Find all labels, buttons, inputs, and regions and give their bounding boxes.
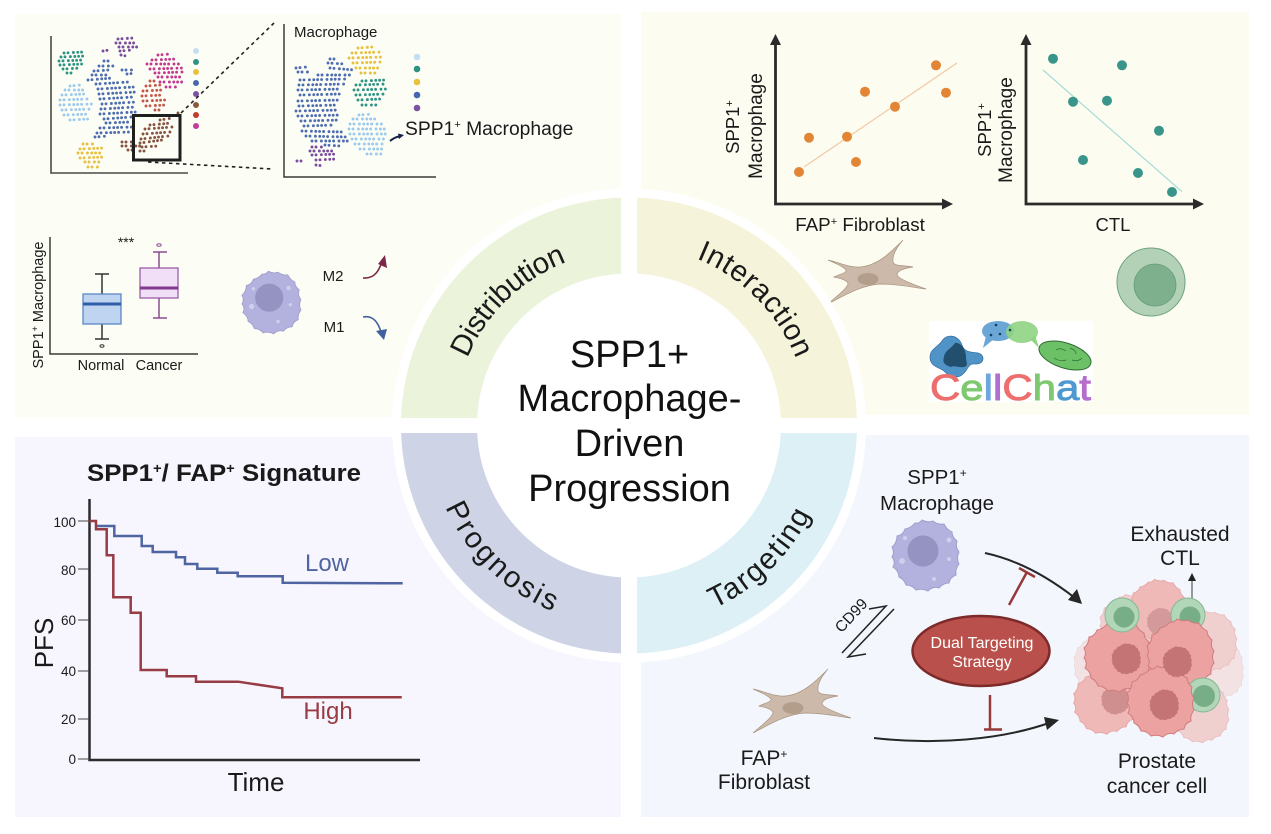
label: prostate cancer cell: Prostate — [1118, 750, 1196, 773]
icon: fibroblast — [828, 240, 926, 304]
arrow: macrophage to tumor — [985, 553, 1082, 604]
scatter plot: CTL correlation: Macrophage — [996, 77, 1017, 183]
label: exhausted CTL: Exhausted — [1130, 523, 1230, 546]
survival chart: 60 — [61, 613, 76, 628]
title — [518, 334, 741, 510]
scatter plot: FAP+ fibroblast correlation: + — [724, 100, 736, 107]
scatter plot: all cell clusters — [51, 36, 199, 173]
survival chart: Time — [228, 767, 284, 797]
label: SPP1+ macrophage: + — [960, 466, 967, 480]
title: Driven — [575, 423, 684, 465]
survival chart: 40 — [61, 664, 76, 679]
ring segment: Prognosis — [401, 433, 621, 654]
scatter plot: macrophage subclusters: + — [454, 119, 461, 131]
survival chart: 0 — [68, 752, 76, 767]
heading: signature: SPP1 — [87, 460, 150, 487]
scatter plot: FAP+ fibroblast correlation: FAP — [795, 214, 831, 235]
survival chart: 100 — [53, 515, 76, 530]
scatter plot: CTL correlation — [974, 34, 1204, 235]
inhibition: dual targeting to macrophage arrow — [1009, 568, 1035, 605]
label: exhausted CTL — [1130, 523, 1230, 570]
scatter plot: FAP+ fibroblast correlation — [722, 34, 957, 235]
box plot: *** — [118, 234, 135, 250]
box plot: + — [30, 326, 40, 331]
label: FAP+ fibroblast: FAP — [741, 747, 780, 770]
scatter plot: FAP+ fibroblast correlation: + — [831, 216, 837, 228]
box plot — [30, 234, 198, 374]
label: SPP1+ macrophage: SPP1 — [907, 466, 960, 489]
oval: dual targeting strategy: Dual Targeting — [931, 635, 1033, 652]
icon: macrophage — [892, 520, 959, 591]
heading: signature: Signature — [235, 460, 361, 487]
CD99 reversible interaction — [832, 596, 894, 657]
title: Progression — [528, 468, 731, 510]
oval: dual targeting strategy — [912, 616, 1050, 686]
ring segment: Interaction: Interaction — [698, 240, 809, 357]
panel: interaction — [641, 12, 1249, 415]
survival chart: High — [303, 698, 353, 725]
ring segment: Targeting — [637, 433, 857, 654]
label: SPP1+ macrophage: Macrophage — [880, 492, 994, 515]
scatter plot: macrophage subclusters — [284, 24, 573, 177]
scatter plot: macrophage subclusters: SPP1 — [405, 119, 454, 140]
survival chart: PFS — [29, 618, 59, 668]
label: prostate cancer cell: cancer cell — [1107, 775, 1207, 798]
label: FAP+ fibroblast: + — [780, 747, 787, 761]
icon: prostate cancer cell cluster — [1074, 579, 1243, 743]
icon: fibroblast — [753, 669, 851, 733]
panel: prognosis — [15, 437, 621, 817]
oval: dual targeting strategy: Strategy — [952, 654, 1012, 671]
label: SPP1+ macrophage — [880, 466, 994, 515]
icon: macrophage with M2/M1 polarization — [242, 255, 387, 340]
central ring diagram — [392, 189, 866, 662]
box plot: Cancer — [136, 358, 183, 374]
CD99 reversible interaction: CD99 — [832, 596, 871, 636]
survival chart — [29, 499, 420, 797]
title: Macrophage- — [518, 378, 741, 420]
box plot: Macrophage — [31, 242, 47, 326]
box plot: Normal — [78, 358, 124, 374]
survival chart: Low — [305, 550, 350, 577]
ring segment: Targeting: Targeting — [706, 508, 813, 606]
heading: signature: + — [226, 460, 235, 476]
inhibition: dual targeting to fibroblast arrow — [984, 695, 1002, 730]
label: exhausted CTL: CTL — [1160, 547, 1200, 570]
survival chart: 20 — [61, 712, 76, 727]
box plot: SPP1 — [31, 331, 47, 368]
panel: targeting — [641, 435, 1249, 817]
logo: CellChat — [929, 321, 1095, 408]
scatter plot: FAP+ fibroblast correlation: Fibroblast — [837, 214, 926, 235]
arrow: fibroblast to tumor — [874, 717, 1059, 741]
heading: signature: / FAP — [162, 460, 226, 487]
label: FAP+ fibroblast — [718, 747, 810, 794]
heading: signature: + — [153, 460, 162, 476]
arrow: CTL exit — [1188, 573, 1196, 600]
scatter plot: macrophage subclusters: Macrophage — [294, 24, 377, 41]
zoom connector lines — [148, 23, 274, 169]
ring segment: Distribution: Distribution — [450, 249, 565, 356]
icon: macrophage with M2/M1 polarization: M1 — [324, 319, 344, 336]
panel: distribution — [15, 14, 621, 417]
scatter plot: CTL correlation: SPP1 — [974, 110, 995, 157]
scatter plot: CTL correlation: + — [976, 103, 988, 110]
logo: CellChat: CellChat — [930, 367, 1091, 408]
icon: macrophage with M2/M1 polarization: M2 — [323, 268, 343, 285]
survival chart: 80 — [61, 563, 76, 578]
label: FAP+ fibroblast: Fibroblast — [718, 771, 810, 794]
ring segment: Distribution — [401, 198, 621, 418]
icon: CTL cell — [1117, 248, 1185, 316]
scatter plot: CTL correlation: CTL — [1096, 214, 1130, 235]
scatter plot: FAP+ fibroblast correlation: SPP1 — [722, 107, 743, 154]
title: SPP1+ — [570, 334, 689, 376]
ring segment: Interaction — [637, 198, 857, 418]
ring segment: Prognosis: Prognosis — [446, 500, 556, 610]
scatter plot: macrophage subclusters: Macrophage — [461, 119, 573, 140]
label: prostate cancer cell — [1107, 750, 1207, 798]
scatter plot: FAP+ fibroblast correlation: Macrophage — [746, 73, 767, 179]
